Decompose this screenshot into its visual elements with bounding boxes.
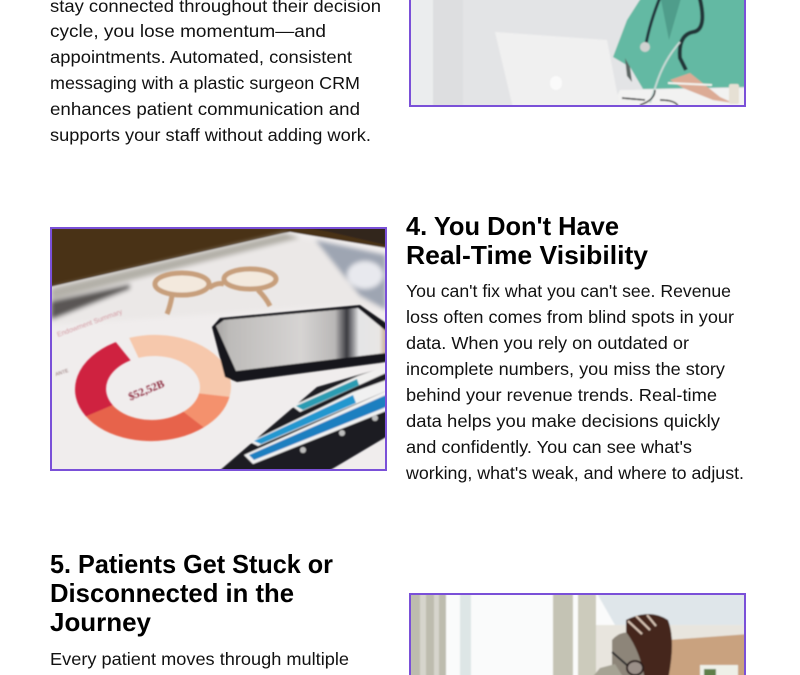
photo: financial report with donut chart, phone and glasses: ANTE [55,368,70,378]
text block: section 3 body continuation: appointments. Automated, consistent [50,47,352,67]
heading: section 4 [406,211,649,270]
photo: nurse in teal scrubs at a laptop [410,0,750,110]
text block: section 3 body continuation: enhances patient communication and [50,99,360,119]
heading: section 5: 5. Patients Get Stuck or [50,549,333,579]
text block: section 4 body: behind your revenue trends. Real-time [406,385,717,405]
photo: financial report with donut chart, phone and glasses [51,224,386,472]
photo: financial report with donut chart, phone and glasses: $52,52B [127,378,167,403]
text block: section 4 body: data helps you make decisions quickly [406,411,720,431]
text block: section 3 body continuation: supports your staff without adding work. [50,125,371,145]
heading: section 5: Journey [50,607,152,637]
heading: section 4: Real-Time Visibility [406,240,649,270]
donut [74,334,232,442]
photo: stressed man holding his head by a window [410,590,750,675]
text block: section 3 body continuation [50,0,381,145]
text block: section 4 body [405,281,744,483]
text block: section 4 body: working, what's weak, and where to adjust. [405,463,744,483]
text block: section 4 body: loss often comes from blind spots in your [406,307,734,327]
photo: financial report with donut chart, phone and glasses: Endowment Summary [56,309,124,339]
heading: section 5: Disconnected in the [50,578,294,608]
text block: section 4 body: incomplete numbers, you miss the story [406,359,725,379]
text block: section 4 body: and confidently. You can see what's [406,437,692,457]
heading: section 5 [50,549,333,637]
text block: section 3 body continuation: messaging with a plastic surgeon CRM [50,73,360,93]
glasses [155,269,276,314]
text block: section 4 body: You can't fix what you can't see. Revenue [406,281,731,301]
heading: section 4: 4. You Don't Have [406,211,619,241]
text block: section 3 body continuation: cycle, you lose momentum—and [50,21,326,41]
black chart panel [218,367,386,472]
text block: section 5 body start: Every patient moves through multiple [50,649,349,669]
text block: section 4 body: data. When you rely on outdated or [406,333,689,353]
phone [212,305,386,382]
